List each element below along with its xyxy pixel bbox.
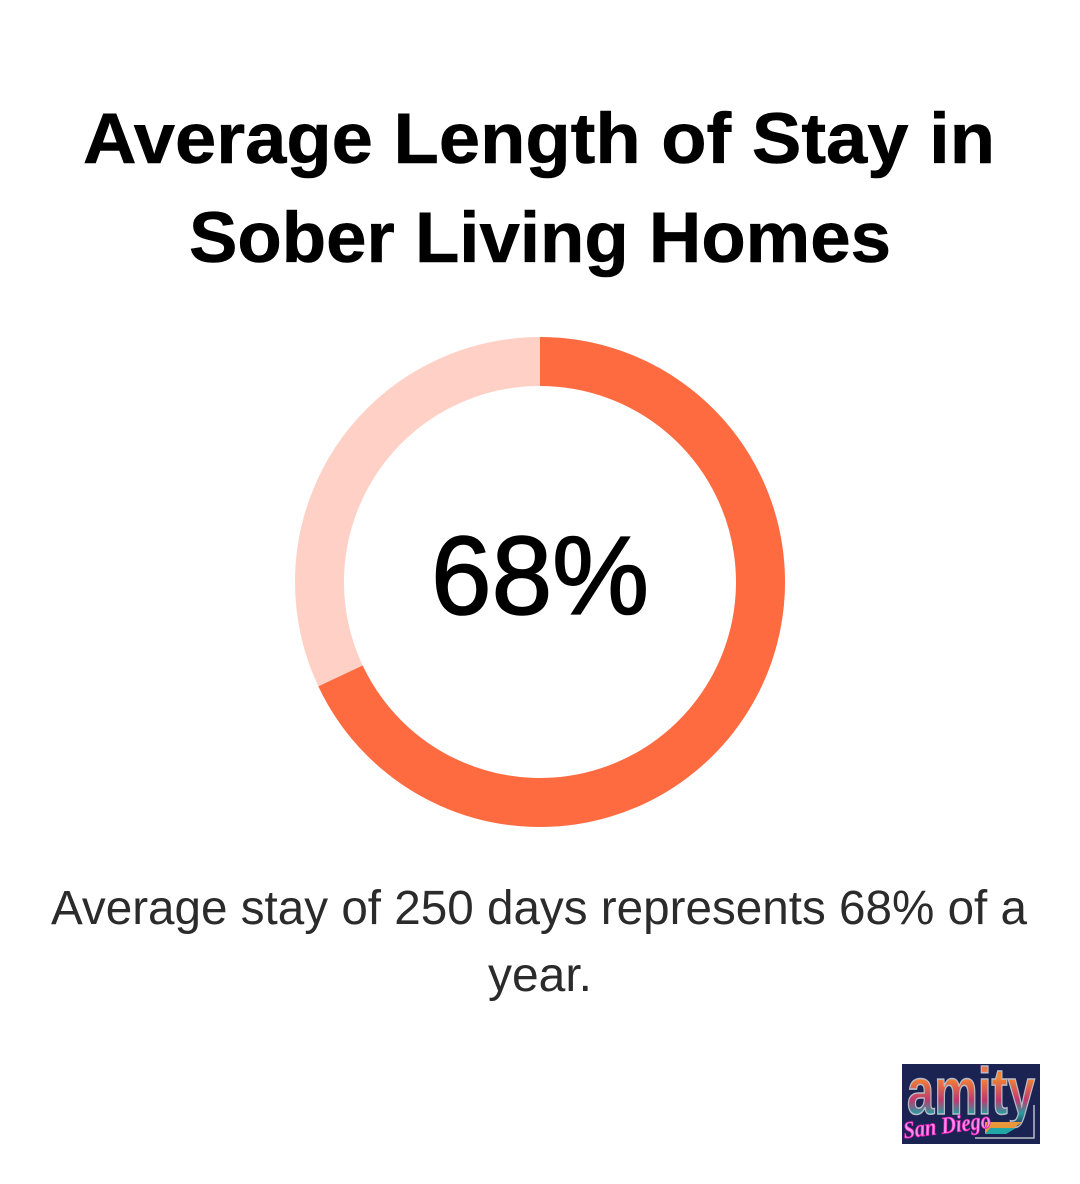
logo: amity San Diego: San Diego [902,1108,992,1144]
caption: Average stay of 250 days represents 68% of a [51,882,1027,935]
title: Sober Living Homes [189,199,891,278]
donut chart: 68% [320,362,761,802]
logo: amity San Diego: amity [907,1054,1035,1128]
title [83,100,995,278]
caption [51,882,1027,1002]
title: Average Length of Stay in [83,100,995,179]
caption: year. [488,949,592,1002]
donut center value: 68% [431,514,649,638]
donut remainder track [320,362,760,802]
donut value arc [340,362,761,802]
logo: amity San Diego [902,1064,1040,1144]
